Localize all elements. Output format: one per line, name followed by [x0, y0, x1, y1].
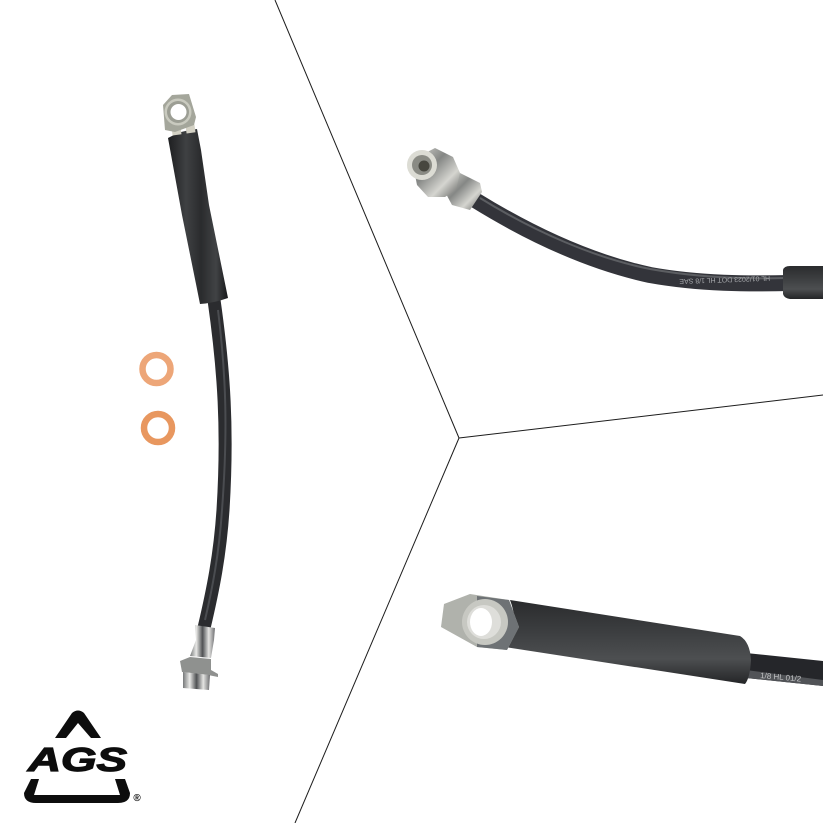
banjo fitting: [441, 594, 519, 650]
rubber sleeve: [168, 129, 228, 304]
detail: top right end of hose: [407, 148, 823, 299]
divider lines between panels: [275, 0, 823, 823]
elbow fitting: [407, 148, 482, 210]
washer top: [142, 355, 170, 383]
full brake hose: [163, 94, 228, 690]
hose body: [204, 300, 225, 628]
sleeve: [783, 266, 823, 299]
hose: [746, 653, 823, 686]
registered mark: ®: [133, 793, 141, 804]
hose: [475, 200, 790, 283]
bottom crimp fitting: [180, 625, 218, 690]
sleeve: [505, 600, 751, 684]
logo wordmark: AGS: [27, 741, 127, 778]
washer bottom: [144, 414, 172, 442]
detail: bottom right end of hose: [441, 594, 823, 686]
logo triangle top: [55, 710, 101, 738]
top banjo fitting: [163, 94, 196, 136]
hose markings: 1/8 HL 01/2: [760, 671, 802, 684]
copper washers: [142, 355, 172, 442]
hose markings: HL 01/2023 DOT HL 1/8 SAE: [679, 274, 770, 284]
logo base: [24, 779, 130, 803]
AGS logo: [24, 710, 141, 804]
